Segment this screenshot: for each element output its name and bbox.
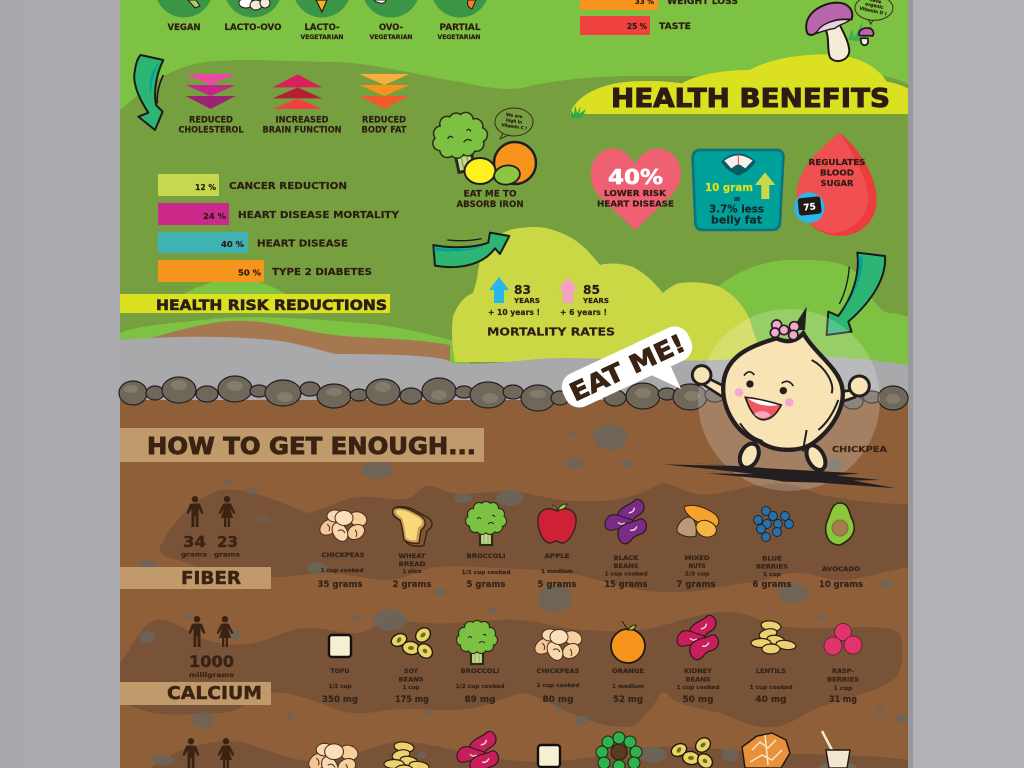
blood drop: BLOOD <box>820 168 854 178</box>
calcium item labels: 40 mg <box>756 695 786 705</box>
soil patch: third row <box>150 741 908 768</box>
diet labels: OVO- <box>379 23 403 33</box>
calcium people <box>188 616 234 647</box>
diet circles row <box>155 0 489 18</box>
mushroom speech text: organic <box>865 1 884 11</box>
heart: LOWER RISK <box>604 189 667 198</box>
calcium banner <box>120 682 271 705</box>
calcium item labels: BERRIES <box>827 676 859 684</box>
weight scale: = <box>733 195 741 205</box>
calcium item labels: LENTILS <box>756 667 786 675</box>
calcium icons <box>329 613 862 664</box>
mortality rates: + 10 years ! <box>488 308 540 317</box>
fiber item labels: 7 grams <box>676 580 716 590</box>
calcium item labels: SOY <box>404 667 418 675</box>
calcium item labels: 31 mg <box>829 695 857 705</box>
third row icons <box>182 729 857 768</box>
fiber item labels: 1 cup cooked <box>604 572 648 578</box>
calcium item labels: TOFU <box>330 667 350 675</box>
risk bars: 24 % <box>203 212 226 221</box>
face <box>746 380 754 388</box>
soil <box>120 400 908 768</box>
mortality rates: 85 <box>583 283 600 297</box>
calcium item labels: 52 mg <box>613 695 643 705</box>
risk bars: 50 % <box>238 268 261 278</box>
fiber item labels: BLUE <box>762 554 782 562</box>
arms <box>704 378 728 397</box>
calcium item labels: 1 cup cooked <box>536 683 580 689</box>
calcium item labels: BEANS <box>686 676 711 684</box>
calcium item labels: ORANGE <box>612 667 644 675</box>
weight scale: 10 gram <box>705 182 753 194</box>
fiber item labels: APPLE <box>544 552 570 560</box>
blood drop: REGULATES <box>808 158 866 167</box>
iron group: Vitamin C ! <box>501 122 528 131</box>
calcium item labels: 1/2 cup <box>328 684 352 690</box>
calcium banner: CALCIUM <box>167 684 262 704</box>
calcium item labels: CHICKPEAS <box>536 667 580 675</box>
fiber amounts: 34 <box>183 533 206 551</box>
iron group: We are <box>506 112 523 119</box>
fiber item labels: 1 slice <box>402 569 422 575</box>
iron group: EAT ME TO <box>464 190 516 200</box>
risk bars: HEART DISEASE MORTALITY <box>238 210 399 221</box>
iron group: ABSORB IRON <box>456 200 524 210</box>
calcium item labels: BROCCOLI <box>460 667 500 675</box>
fiber item labels: 5 grams <box>538 580 576 590</box>
fiber panel <box>120 496 863 590</box>
mushroom speech text: Vitamin D ! <box>859 6 887 17</box>
benefit labels: CHOLESTEROL <box>178 126 244 136</box>
fiber item labels: BREAD <box>398 560 426 568</box>
fiber item labels: NUTS <box>688 562 706 570</box>
diet labels: LACTO-OVO <box>224 23 282 33</box>
fiber item labels: 5 grams <box>466 580 506 590</box>
top bars <box>580 0 738 35</box>
triangles: reduced cholesterol <box>186 74 236 109</box>
poster base <box>120 0 908 768</box>
fiber item labels: 1 medium <box>541 569 573 575</box>
risk bars: 12 % <box>195 183 216 192</box>
mortality rates: YEARS <box>582 297 609 305</box>
weight scale: 3.7% less <box>709 204 764 216</box>
triangles: increased brain function <box>273 74 322 109</box>
benefit labels: REDUCED <box>189 116 233 126</box>
fiber amounts: 23 <box>217 533 238 551</box>
fiber amounts <box>181 533 240 558</box>
risk bars: HEART DISEASE <box>257 238 348 250</box>
blood drop: 75 <box>803 202 816 214</box>
risk bars: TYPE 2 DIABETES <box>272 267 372 278</box>
calcium amount: milligrams <box>189 671 234 679</box>
calcium item labels: 89 mg <box>464 695 496 705</box>
calcium item labels: 1 cup cooked <box>676 685 720 691</box>
benefit labels: REDUCED <box>362 116 406 126</box>
soil stones <box>138 424 908 765</box>
calcium item labels: RASP- <box>832 667 854 675</box>
benefit labels <box>178 116 407 136</box>
ground scribble <box>663 462 897 488</box>
fiber amounts: grams <box>214 550 240 558</box>
iron group: high in <box>506 117 523 125</box>
health risk banner: HEALTH RISK REDUCTIONS <box>156 298 387 314</box>
fiber item labels: BROCCOLI <box>466 552 506 560</box>
speech bubble: eat me <box>557 322 697 412</box>
mortality rates: 83 <box>514 283 531 297</box>
fiber item labels: 2 grams <box>392 580 432 590</box>
chickpea label: CHICKPEA <box>832 445 887 454</box>
top bars: 25 % <box>627 22 647 31</box>
how to get enough banner <box>120 428 484 462</box>
blood drop <box>794 133 877 236</box>
calcium item labels: 50 mg <box>682 695 714 705</box>
fiber item labels: 1 cup cooked <box>320 568 364 574</box>
heart <box>591 149 681 231</box>
mortality rates: MORTALITY RATES <box>487 326 615 338</box>
grey road band <box>120 337 908 420</box>
bow <box>770 320 799 340</box>
body <box>723 333 843 450</box>
dark green hill <box>120 60 908 370</box>
legs <box>736 441 763 471</box>
calcium item labels: 1 medium <box>612 684 644 690</box>
calcium amount: 1000 <box>189 652 234 671</box>
fiber item labels: BERRIES <box>756 562 788 570</box>
benefit labels: INCREASED <box>276 116 328 126</box>
triangles: reduced body fat <box>359 74 409 109</box>
diet labels: VEGETARIAN <box>300 35 344 41</box>
fiber icons <box>317 497 854 546</box>
mortality rates <box>487 277 615 338</box>
soil patch: fiber <box>160 482 908 592</box>
calcium item labels: 1 cup <box>834 686 853 692</box>
fiber item labels: MIXED <box>684 554 710 562</box>
fiber item labels <box>318 551 863 590</box>
iron group <box>428 108 536 210</box>
chickpea halo <box>698 309 880 491</box>
speech bubble: eat me: EAT ME! <box>565 329 690 407</box>
fiber item labels: 35 grams <box>318 580 362 590</box>
soil patch: calcium <box>120 612 902 727</box>
top bars: TASTE <box>659 22 691 32</box>
diet labels: VEGETARIAN <box>370 35 413 41</box>
calcium item labels: 1 cup cooked <box>750 685 793 691</box>
grass tuft <box>570 105 586 118</box>
diet labels <box>168 23 481 41</box>
health risk banner <box>120 294 390 314</box>
fiber item labels: BEANS <box>614 562 639 570</box>
how to get enough banner: HOW TO GET ENOUGH... <box>147 434 476 460</box>
fiber item labels: 1/2 cup cooked <box>462 570 511 576</box>
calcium item labels: 175 mg <box>395 695 429 705</box>
calcium item labels: 80 mg <box>542 695 574 705</box>
benefit labels: BODY FAT <box>362 126 407 136</box>
fiber item labels: WHEAT <box>398 552 426 560</box>
rock row <box>119 376 908 411</box>
blood drop: SUGAR <box>820 179 854 188</box>
right green hills <box>700 260 908 370</box>
left light-green hills <box>120 279 470 370</box>
tuft <box>792 307 807 330</box>
fiber amounts: grams <box>181 550 207 558</box>
mushroom speech text <box>859 0 889 17</box>
fiber item labels: 6 grams <box>752 580 792 590</box>
fiber item labels: 10 grams <box>819 580 863 590</box>
yellow hill: health benefits <box>570 54 908 114</box>
calcium amount <box>189 652 234 679</box>
arrow: right <box>827 253 885 335</box>
weight scale <box>693 150 783 230</box>
fiber item labels: 2/3 cup <box>684 572 710 578</box>
calcium panel <box>120 613 862 705</box>
fiber item labels: BLACK <box>614 554 640 562</box>
diet labels: VEGAN <box>168 23 200 33</box>
calcium item labels: KIDNEY <box>684 667 712 675</box>
benefit labels: BRAIN FUNCTION <box>262 126 342 136</box>
mortality hill <box>452 227 760 362</box>
mushrooms <box>806 0 893 61</box>
calcium item labels: 1/2 cup cooked <box>456 684 505 690</box>
fiber item labels: AVOCADO <box>822 565 860 573</box>
poster shadow <box>908 0 913 768</box>
fiber people <box>186 496 236 527</box>
fiber item labels: 1 cup <box>763 572 781 578</box>
fiber item labels: CHICKPEAS <box>322 551 365 559</box>
arrow: middle <box>433 233 509 267</box>
brown hill <box>120 321 450 370</box>
arrow: top left <box>134 55 163 130</box>
mortality rates: YEARS <box>513 297 540 305</box>
diet labels: VEGETARIAN <box>438 35 481 41</box>
mortality rates: + 6 years ! <box>560 308 607 317</box>
diet labels: PARTIAL <box>440 23 481 33</box>
risk bars: 40 % <box>221 240 244 249</box>
heart: 40% <box>608 165 663 189</box>
diet labels: LACTO- <box>304 23 340 33</box>
risk bars <box>158 174 399 282</box>
heart: HEART DISEASE <box>597 200 674 208</box>
fiber item labels: 15 grams <box>604 580 648 590</box>
calcium item labels <box>322 667 859 705</box>
risk bars: CANCER REDUCTION <box>229 181 347 192</box>
chickpea mascot <box>663 307 897 488</box>
weight scale: belly fat <box>711 214 762 226</box>
calcium item labels: 350 mg <box>322 695 358 705</box>
fiber banner: FIBER <box>181 569 242 589</box>
health benefits title: HEALTH BENEFITS <box>611 84 890 114</box>
fiber banner <box>120 567 271 589</box>
calcium item labels: BEANS <box>398 676 424 684</box>
calcium item labels: 1 cup <box>402 685 420 691</box>
